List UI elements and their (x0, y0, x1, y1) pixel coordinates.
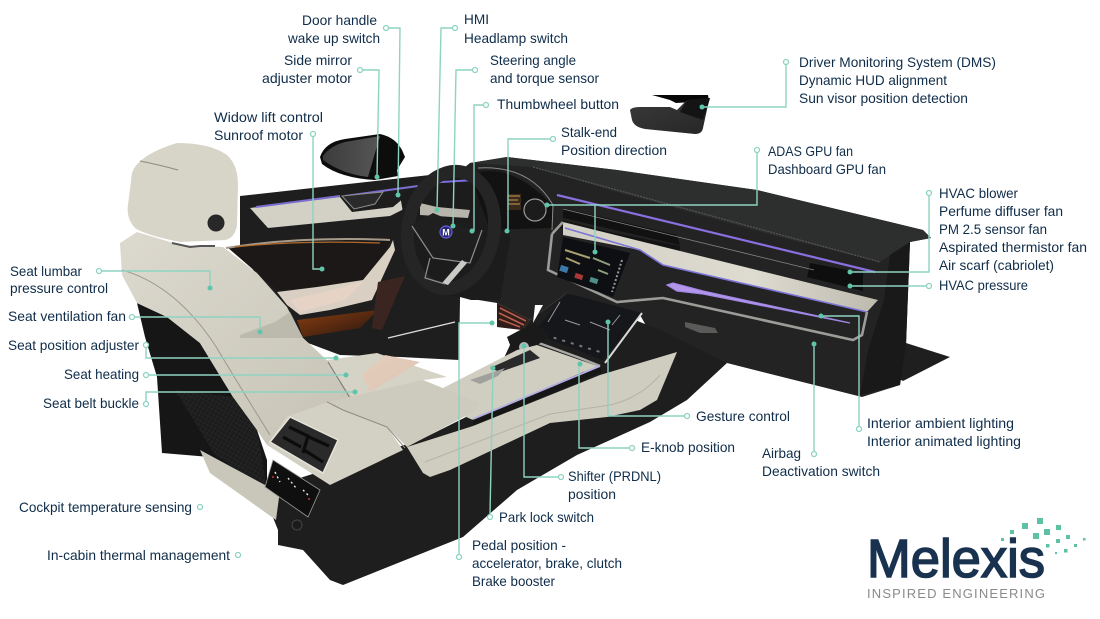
callout: window lift and sunroof: Sunroof motor (214, 127, 303, 143)
center console lower (262, 293, 727, 585)
callout: airbag (762, 342, 880, 479)
callout: seat lumbar: pressure control (10, 280, 108, 296)
callout: door handle wake up switch: Door handle (302, 12, 377, 28)
climate panel (533, 293, 642, 366)
callout: e-knob: E-knob position (641, 439, 735, 455)
door panel (226, 175, 460, 360)
Melexis logo (867, 518, 1086, 601)
callout: stalk-end: Stalk-end (561, 124, 617, 140)
rear air vents (270, 417, 338, 473)
Melexis logo: Melexis (867, 529, 1045, 589)
floor panel (892, 343, 950, 381)
callout: HVAC blower group: Aspirated thermistor fan (939, 239, 1087, 255)
headrest (128, 143, 238, 247)
door armrest (277, 240, 395, 315)
callout: seat position: Seat position adjuster (8, 337, 139, 353)
callout: seat lumbar (10, 263, 212, 296)
callout: park lock: Park lock switch (499, 509, 594, 525)
console side panel (407, 352, 677, 477)
callout: driver monitoring (700, 54, 996, 110)
callout: side mirror adjuster motor: adjuster motor (262, 70, 352, 86)
seat cushion (303, 338, 447, 410)
door upper trim (250, 186, 420, 228)
callout: HVAC pressure: HVAC pressure (939, 277, 1028, 293)
callout: side mirror adjuster motor: Side mirror (284, 52, 352, 68)
callout: window lift and sunroof: Widow lift control (214, 109, 323, 125)
rear view mirror (630, 95, 710, 134)
callout: thumbwheel button: Thumbwheel button (497, 96, 619, 112)
console surface (443, 345, 600, 420)
callout: cockpit temperature: Cockpit temperature sensing (19, 499, 192, 515)
central touch screen (557, 237, 630, 297)
red vent (497, 303, 530, 330)
callout: driver monitoring: Driver Monitoring System (DMS) (799, 54, 996, 70)
callout: HVAC blower group: PM 2.5 sensor fan (939, 221, 1047, 237)
callout: door handle wake up switch (287, 12, 400, 198)
air vents (563, 208, 680, 245)
callout: seat belt buckle (43, 390, 358, 411)
callout: steering angle sensor (450, 52, 599, 228)
callout: gesture control: Gesture control (696, 408, 790, 424)
callout: HMI headlamp switch (434, 11, 568, 212)
Melexis logo: INSPIRED ENGINEERING (867, 586, 1045, 601)
callout: side mirror adjuster motor (262, 52, 380, 180)
callout: window lift and sunroof (214, 109, 324, 272)
callout: HMI headlamp switch: HMI (464, 11, 489, 27)
callout: gesture control (606, 320, 790, 424)
callout: ADAS and dashboard GPU fan (544, 143, 886, 254)
callout: pedal position: Brake booster (472, 573, 555, 589)
callout: HVAC pressure (848, 277, 1028, 293)
callout: interior lighting (818, 314, 1021, 449)
callout: door handle wake up switch: wake up switch (287, 30, 380, 46)
car interior illustration (120, 134, 950, 585)
seat lower shell (200, 450, 280, 520)
callout: pedal position (456, 320, 622, 589)
callout: HMI headlamp switch: Headlamp switch (464, 30, 568, 46)
shifter (507, 322, 550, 352)
door pocket (227, 240, 390, 290)
callout: pedal position: accelerator, brake, clutch (472, 555, 622, 571)
callout: HVAC blower group: Perfume diffuser fan (939, 203, 1063, 219)
callout: ADAS and dashboard GPU fan: ADAS GPU fan (768, 143, 853, 159)
door orange glow (297, 310, 378, 337)
callout: steering angle sensor: and torque sensor (490, 70, 599, 86)
instrument cluster (400, 168, 553, 300)
armrest and rear console (265, 380, 480, 530)
callout: interior lighting: Interior ambient lighting (867, 415, 1014, 431)
callout: driver monitoring: Sun visor position detection (799, 90, 968, 106)
callout: driver monitoring: Dynamic HUD alignment (799, 72, 947, 88)
seat back (120, 232, 352, 445)
callout: ADAS and dashboard GPU fan: Dashboard GPU fan (768, 161, 886, 177)
steering wheel (398, 164, 504, 296)
side mirror (320, 134, 405, 180)
callout: seat belt buckle: Seat belt buckle (43, 395, 139, 411)
upper ambient light (557, 195, 875, 272)
rear control panel (265, 460, 320, 517)
callout: thumbwheel button (470, 96, 619, 234)
dashboard (430, 157, 931, 397)
callout: in-cabin thermal: In-cabin thermal management (47, 547, 230, 563)
callout: seat position (8, 337, 338, 360)
lower ambient highlight (667, 283, 850, 323)
silver frame (548, 234, 867, 340)
callout: HVAC blower group: HVAC blower (939, 185, 1018, 201)
callout: shifter (522, 344, 661, 502)
callout: seat heating: Seat heating (64, 366, 139, 382)
steering logo: M (442, 228, 450, 238)
callout: interior lighting: Interior animated lighting (867, 433, 1021, 449)
glove handle (685, 322, 718, 333)
callout: seat heating (64, 366, 348, 382)
callout: HVAC blower group: Air scarf (cabriolet) (939, 257, 1054, 273)
callout: airbag: Airbag (762, 445, 801, 461)
callout: steering angle sensor: Steering angle (490, 52, 576, 68)
white gaps (443, 297, 507, 377)
callout: park lock (488, 366, 594, 525)
callout: e-knob (578, 362, 735, 455)
callout: HVAC blower group (848, 185, 1087, 274)
callout: shifter: position (568, 486, 616, 502)
callout: stalk-end: Position direction (561, 142, 667, 158)
logo dots (1001, 518, 1086, 554)
beige trim (563, 222, 878, 312)
console slot (472, 367, 602, 426)
callout: airbag: Deactivation switch (762, 463, 880, 479)
callout: shifter: Shifter (PRDNL) (568, 468, 661, 484)
rear knob (292, 520, 302, 530)
seat rear mesh panel (137, 303, 267, 490)
callout: seat ventilation: Seat ventilation fan (8, 308, 126, 324)
callout: stalk-end (504, 124, 667, 234)
callout: pedal position: Pedal position - (472, 537, 566, 553)
callout: seat lumbar: Seat lumbar (10, 263, 82, 279)
callout: seat ventilation (8, 308, 262, 334)
